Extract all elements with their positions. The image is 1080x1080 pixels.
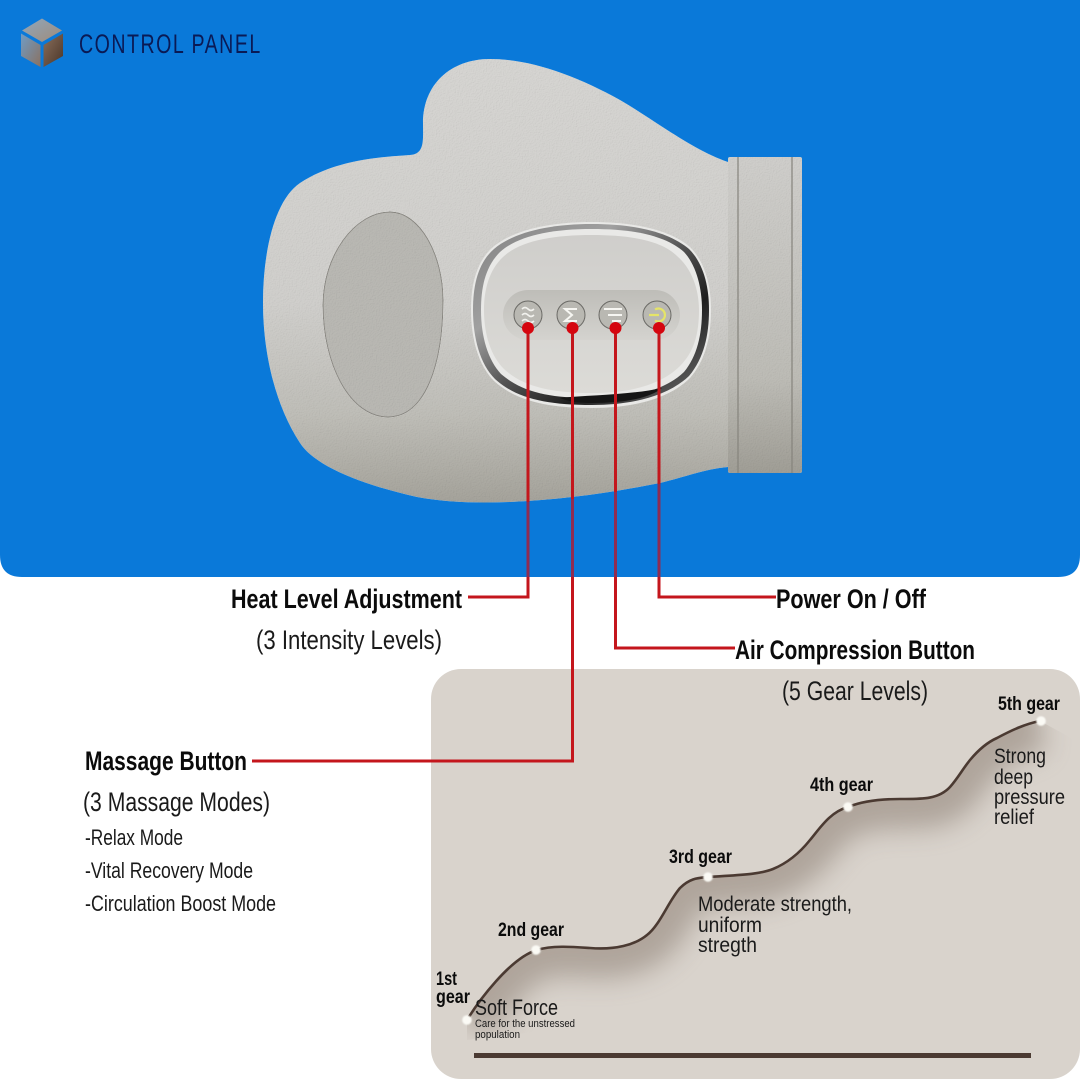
label: 2nd gear: 2nd gear (498, 920, 564, 941)
blue header panel (0, 0, 1080, 577)
label: 3 intensity levels: (3 Intensity Levels) (256, 625, 442, 655)
label: massage button: Massage Button (85, 746, 247, 776)
text: strong deep pressure relief: relief (994, 806, 1034, 829)
connector dots (522, 322, 665, 334)
label: 5 gear levels: (5 Gear Levels) (782, 676, 928, 706)
curve shading (467, 721, 1040, 1020)
icon: air compression button (599, 301, 627, 329)
label: 1st gear (436, 969, 471, 1008)
line: heat level (468, 327, 528, 597)
text: strong deep pressure relief: deep (994, 766, 1033, 789)
list: massage modes: -Circulation Boost Mode (85, 891, 276, 916)
gear points (462, 716, 1046, 1025)
wrist cuff (728, 157, 802, 473)
text: strong deep pressure relief: pressure (994, 786, 1065, 809)
baseline (474, 1053, 1031, 1058)
label: 1st gear: 1st (436, 969, 458, 990)
leader lines (252, 327, 776, 761)
control panel housing (471, 222, 711, 408)
text: moderate strength: stregth (698, 934, 757, 957)
label: 5th gear: 5th gear (998, 694, 1061, 715)
label: 1st gear: gear (436, 987, 471, 1008)
text: moderate strength (698, 893, 852, 957)
text: care for the unstressed population: Care for the unstressed (475, 1018, 575, 1030)
list: massage modes: -Relax Mode (85, 825, 183, 850)
icon: power button (643, 301, 671, 329)
text: strong deep pressure relief: Strong (994, 745, 1046, 768)
chart: gear curve (462, 716, 1046, 1058)
label: 3 massage modes: (3 Massage Modes) (83, 787, 270, 817)
panel: gear chart background (431, 669, 1080, 1079)
list: massage modes (85, 825, 276, 916)
label: power on off: Power On / Off (776, 584, 927, 614)
line: massage (252, 327, 572, 761)
text: moderate strength: uniform (698, 914, 762, 937)
icon: cube logo (21, 18, 63, 67)
label: heat level adjustment: Heat Level Adjustment (231, 584, 462, 614)
text: soft force: Soft Force (475, 995, 558, 1020)
line: power (659, 327, 776, 597)
curve line (467, 721, 1040, 1020)
label: 3rd gear: 3rd gear (669, 847, 733, 868)
text: care for the unstressed population (475, 1018, 575, 1041)
line: air compression (616, 327, 735, 648)
icon: heat button (514, 301, 542, 329)
oval palm pad (323, 212, 443, 417)
leader lines over blue (528, 484, 659, 577)
text: care for the unstressed population: population (475, 1029, 520, 1041)
text: moderate strength: Moderate strength, (698, 893, 852, 916)
label: 4th gear: 4th gear (810, 775, 874, 796)
product: massager mitten (263, 59, 802, 502)
label: air compression button: Air Compression Button (735, 635, 975, 665)
list: massage modes: -Vital Recovery Mode (85, 858, 253, 883)
text: strong deep pressure relief (994, 745, 1065, 829)
icon: massage button (557, 301, 585, 329)
mitten body (263, 59, 728, 502)
title: CONTROL PANEL (79, 29, 260, 59)
